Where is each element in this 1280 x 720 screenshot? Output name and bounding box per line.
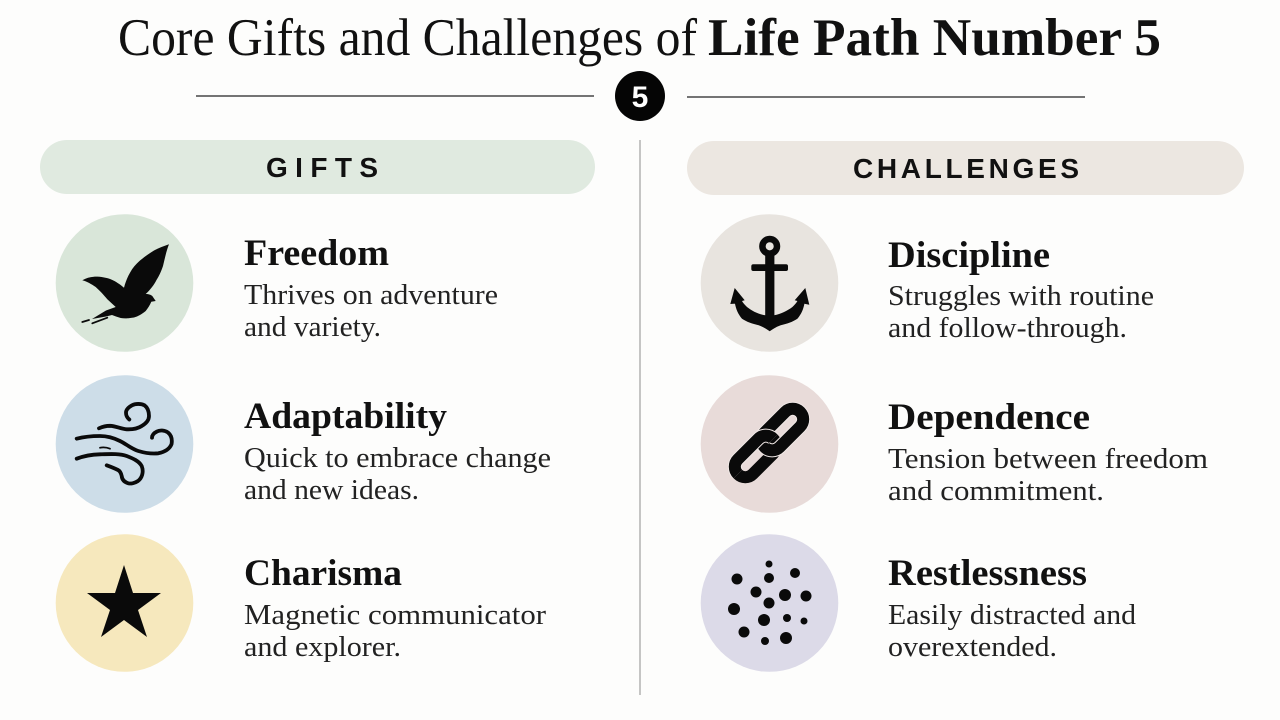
challenge: dependence: Dependence: [888, 397, 1090, 438]
challenge: restlessness: Easily distracted and: [888, 600, 1136, 631]
gift: freedom: Freedom: [244, 233, 389, 274]
challenge: discipline: [701, 214, 1154, 352]
gifts heading: GIFTS: [266, 152, 378, 183]
icon: bird: [82, 244, 169, 323]
gift: adaptability: and new ideas.: [244, 475, 419, 506]
gift: adaptability: Adaptability: [244, 396, 448, 437]
panel: challenges: [687, 141, 1244, 672]
challenge: discipline: and follow-through.: [888, 313, 1127, 344]
icon: chain link: [730, 404, 808, 482]
gift: freedom: [56, 214, 498, 352]
icon: star: [87, 565, 161, 637]
title: Life Path Number 5: [708, 9, 1161, 67]
gift: adaptability: [56, 375, 551, 513]
gift: freedom: Thrives on adventure: [244, 280, 498, 311]
icon: wind: [77, 404, 172, 484]
challenge: dependence: Tension between freedom: [888, 444, 1208, 475]
gift: charisma: Charisma: [244, 553, 402, 594]
gift: charisma: Magnetic communicator: [244, 600, 547, 631]
challenge: discipline: Struggles with routine: [888, 281, 1154, 312]
gift: charisma: and explorer.: [244, 632, 401, 663]
title: [118, 9, 1161, 67]
icon: anchor: [730, 239, 809, 331]
icon: scattered dots: [728, 560, 812, 645]
gift: adaptability: Quick to embrace change: [244, 443, 551, 474]
number badge: 5: [632, 81, 648, 114]
challenge: restlessness: [701, 534, 1136, 672]
gifts heading: [40, 140, 595, 194]
title: Core Gifts and Challenges of: [118, 9, 697, 67]
challenge: dependence: and commitment.: [888, 476, 1104, 507]
gift: freedom: and variety.: [244, 312, 381, 343]
challenge: restlessness: overextended.: [888, 632, 1057, 663]
challenges heading: [687, 141, 1244, 195]
challenges heading: CHALLENGES: [853, 153, 1079, 184]
panel: gifts: [40, 140, 595, 672]
challenge: discipline: Discipline: [888, 235, 1050, 276]
gift: charisma: [56, 534, 547, 672]
challenge: dependence: [701, 375, 1208, 513]
challenge: restlessness: Restlessness: [888, 553, 1087, 594]
number badge: [615, 71, 665, 121]
